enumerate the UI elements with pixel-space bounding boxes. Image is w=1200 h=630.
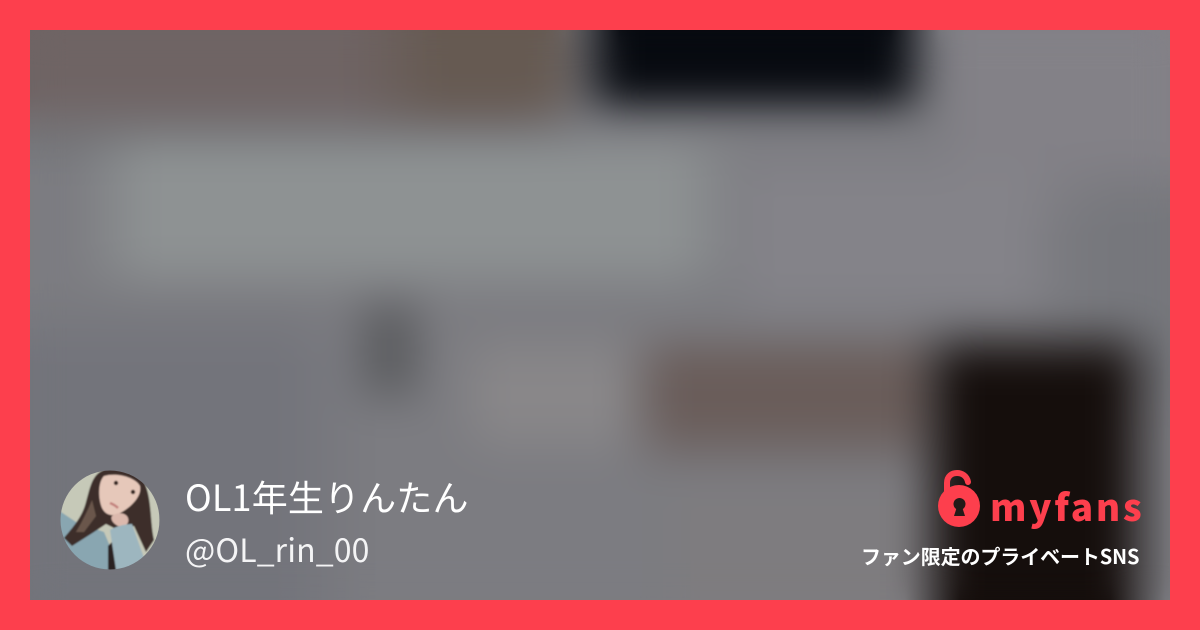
sleeve xyxy=(110,524,144,570)
face xyxy=(99,475,140,515)
logo wordmark: myfans xyxy=(990,478,1145,532)
tagline: ファン限定のプライベートSNS xyxy=(861,541,1139,570)
name: OL1年生りんたん xyxy=(185,470,469,522)
dark hair lower xyxy=(107,542,116,570)
sweater xyxy=(60,512,110,570)
hair xyxy=(64,470,154,552)
hand xyxy=(111,513,128,527)
handle: @OL_rin_00 xyxy=(185,526,369,572)
icon: open padlock logo xyxy=(938,470,980,527)
avatar xyxy=(60,470,160,570)
